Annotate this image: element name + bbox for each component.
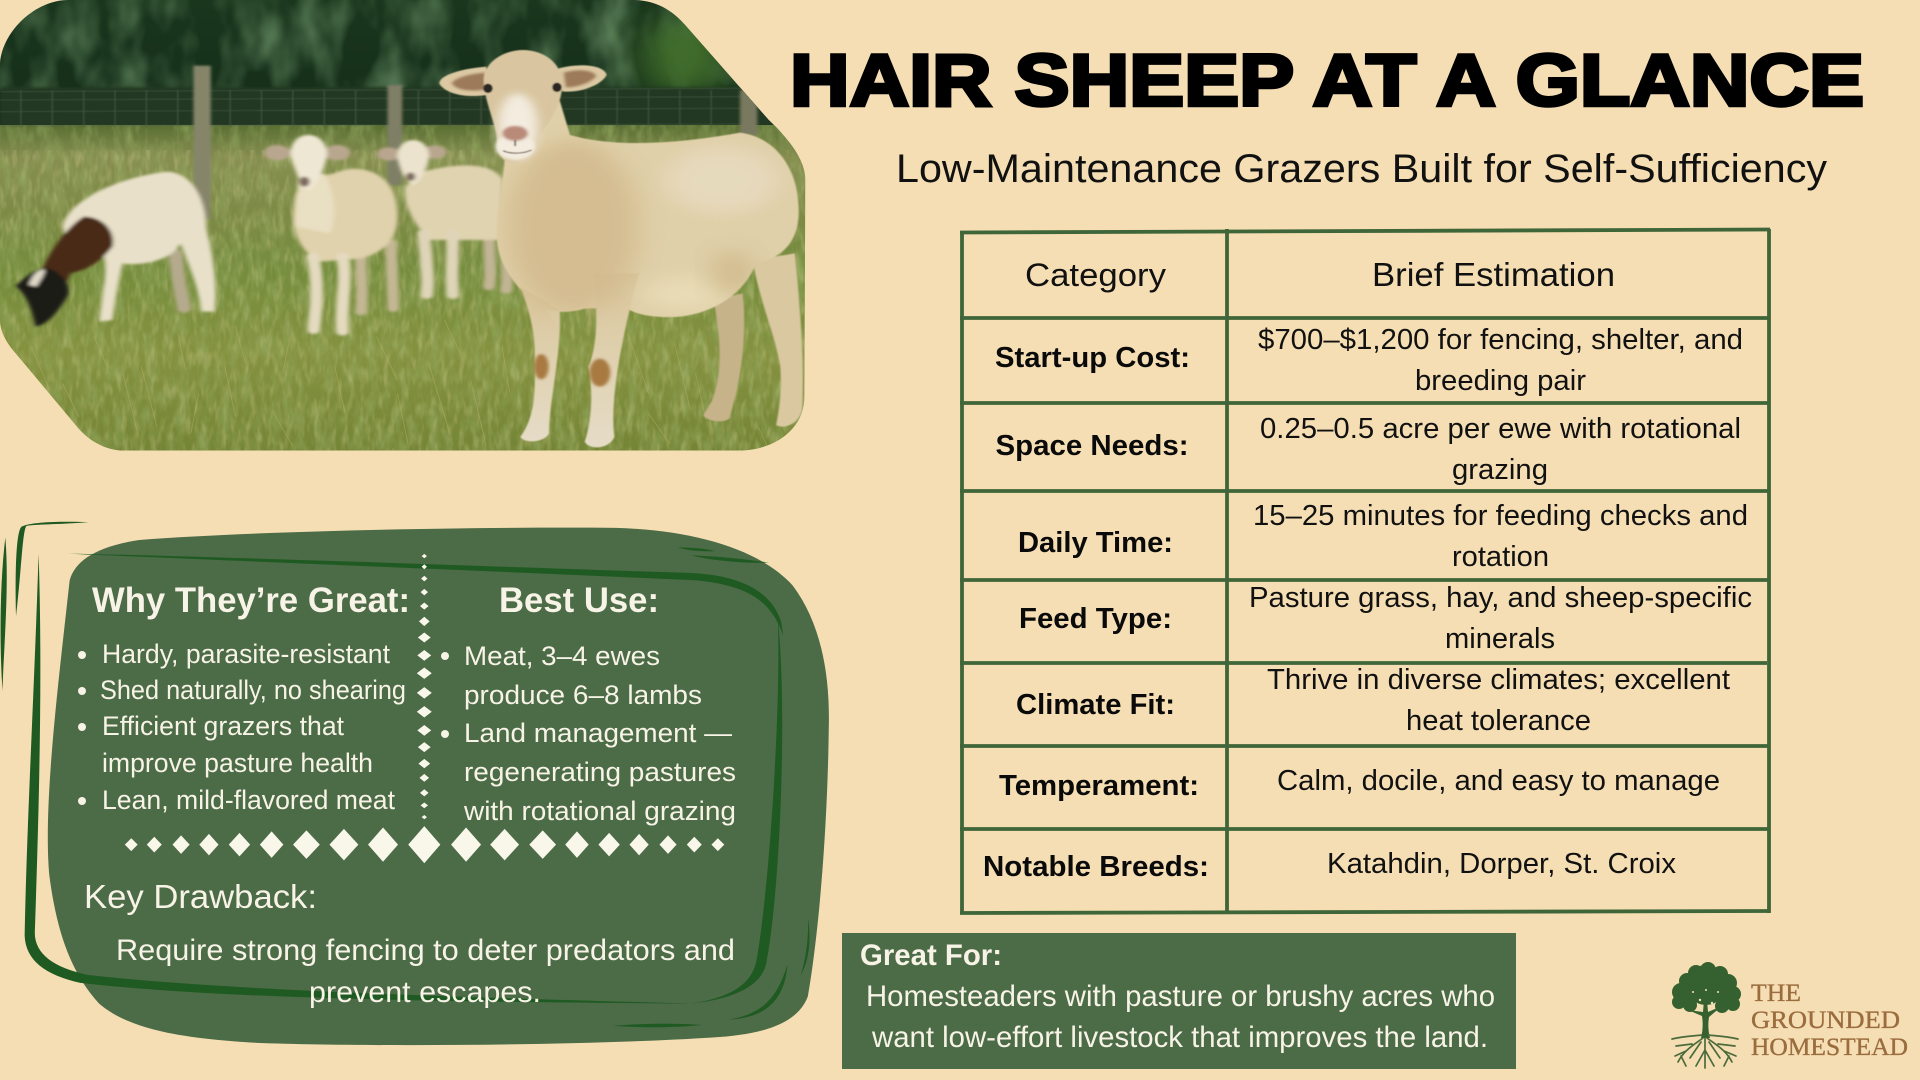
column: why they're great: Hardy, parasite-resistant [102, 639, 390, 669]
panel: why they're great, best use, key drawback [1, 522, 829, 1045]
table row: start-up cost [995, 324, 1743, 397]
logo wordmark [1751, 980, 1908, 1061]
table header row [1025, 256, 1615, 293]
table row: feed type: Pasture grass, hay, and sheep-specific [1249, 582, 1752, 614]
sheep 2: background ewe [264, 135, 398, 332]
vertical diamond divider [417, 554, 432, 819]
column: best use: Land management — [464, 718, 732, 748]
table row: feed type: Feed Type: [1019, 603, 1172, 635]
column: best use: Best Use: [499, 581, 659, 620]
column: best use: regenerating pastures [464, 757, 736, 787]
key drawback [84, 878, 735, 1009]
column: best use: with rotational grazing [463, 796, 736, 826]
table row: notable breeds: Katahdin, Dorper, St. Croix [1327, 848, 1676, 880]
column: best use: Meat, 3–4 ewes [464, 641, 660, 671]
table row: feed type [1019, 582, 1752, 655]
table row: start-up cost: Start-up Cost: [995, 342, 1190, 374]
title: HAIR SHEEP AT A GLANCE [790, 40, 1864, 122]
table row: daily time: Daily Time: [1018, 527, 1173, 559]
table row: space needs: 0.25–0.5 acre per ewe with rotational [1260, 413, 1741, 445]
table header row: Category [1025, 257, 1166, 293]
table row: start-up cost: breeding pair [1415, 365, 1586, 397]
horizontal diamond divider [125, 826, 724, 863]
table row: temperament: Calm, docile, and easy to manage [1277, 765, 1720, 797]
callout: great for [842, 933, 1516, 1069]
subtitle: Low-Maintenance Grazers Built for Self-Sufficiency [896, 147, 1827, 191]
sheep 3: background ewe [377, 140, 507, 295]
table row: climate fit: Climate Fit: [1016, 689, 1175, 721]
column: why they're great: improve pasture health [102, 748, 373, 778]
sheep 1: grazing brown-necked ewe [16, 172, 216, 327]
grass blades [31, 320, 769, 450]
table row: daily time: rotation [1452, 541, 1549, 573]
comparison table [960, 229, 1770, 914]
key drawback: Key Drawback: [84, 878, 317, 915]
table header row: Brief Estimation [1372, 256, 1615, 293]
table row: daily time: 15–25 minutes for feeding checks and [1253, 500, 1748, 532]
table row: climate fit: heat tolerance [1406, 705, 1591, 737]
callout: great for: Great For: [860, 939, 1002, 972]
icon: tree with roots [1672, 962, 1741, 1068]
column: best use [441, 581, 736, 826]
column: best use: produce 6–8 lambs [464, 680, 702, 710]
callout: great for: Homesteaders with pasture or brushy acres who [866, 980, 1495, 1013]
table row: climate fit [1016, 664, 1730, 737]
table row: space needs: grazing [1452, 454, 1548, 486]
table row: space needs: Space Needs: [996, 430, 1188, 462]
table row: temperament [999, 765, 1720, 802]
table row: notable breeds: Notable Breeds: [983, 851, 1209, 883]
logo: the grounded homestead [1672, 962, 1908, 1068]
table grid lines [960, 229, 1770, 914]
table row: climate fit: Thrive in diverse climates; excellent [1267, 664, 1730, 696]
column: why they're great: Efficient grazers that [102, 711, 344, 741]
table row: feed type: minerals [1445, 623, 1555, 655]
column: why they're great: Why They’re Great: [92, 581, 410, 620]
logo wordmark: GROUNDED [1751, 1007, 1900, 1034]
foreground sheep [439, 50, 803, 447]
column: why they're great: Lean, mild-flavored meat [102, 785, 395, 815]
key drawback: prevent escapes. [309, 976, 541, 1009]
key drawback: Require strong fencing to deter predators and [116, 934, 735, 967]
table row: space needs [996, 413, 1741, 486]
column: why they're great [78, 581, 410, 815]
column: why they're great: Shed naturally, no shearing [100, 675, 406, 705]
photo: hair sheep grazing in a fenced pasture [0, 0, 806, 450]
table row: notable breeds [983, 848, 1676, 883]
table row: temperament: Temperament: [999, 770, 1199, 802]
logo wordmark: HOMESTEAD [1751, 1034, 1908, 1061]
panel blob with hand-drawn strokes [0, 522, 829, 1046]
callout: great for: want low-effort livestock that improves the land. [871, 1021, 1488, 1054]
logo wordmark: THE [1751, 980, 1801, 1007]
table row: start-up cost: $700–$1,200 for fencing, shelter, and [1258, 324, 1743, 356]
table row: daily time [1018, 500, 1748, 573]
